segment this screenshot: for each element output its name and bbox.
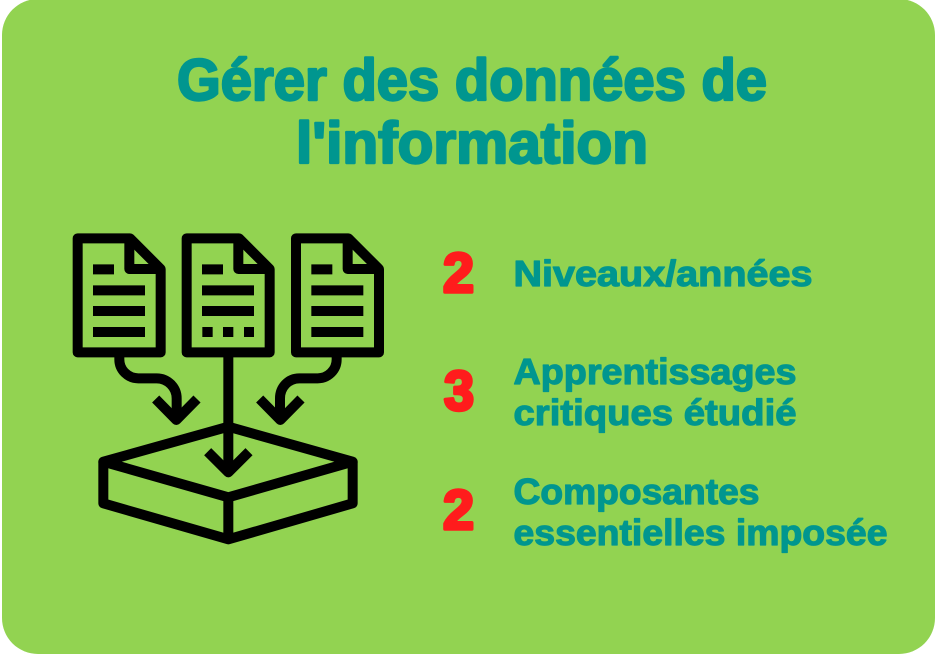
stat: 2 levels: Niveaux/années	[514, 253, 812, 294]
title: Gérer des données de	[177, 48, 767, 113]
icon: box	[103, 427, 353, 539]
stat: 3 critical learnings: Apprentissages	[514, 351, 796, 392]
icon: left document	[78, 238, 161, 352]
stat: 2 essential components: Composantes	[514, 471, 760, 512]
stat: 3 critical learnings: 3	[444, 359, 474, 422]
stat: 2 levels: 2	[443, 241, 474, 304]
arrow: centre document to box	[208, 355, 249, 472]
icon: right document	[296, 238, 379, 352]
stat: 2 essential components: 2	[443, 478, 474, 541]
stat: 2 levels	[443, 241, 812, 304]
stat: 2 essential components: essentielles imposée	[514, 512, 888, 553]
stat: 2 essential components	[443, 471, 888, 553]
arrow: right document to box	[260, 355, 337, 420]
title: l'information	[296, 111, 648, 176]
icon: documents flowing into a box	[78, 238, 379, 539]
icon: centre document	[187, 238, 270, 352]
title	[177, 48, 767, 176]
arrow: left document to box	[119, 355, 197, 420]
stat: 3 critical learnings	[444, 351, 796, 433]
stat: 3 critical learnings: critiques étudié	[514, 392, 796, 433]
